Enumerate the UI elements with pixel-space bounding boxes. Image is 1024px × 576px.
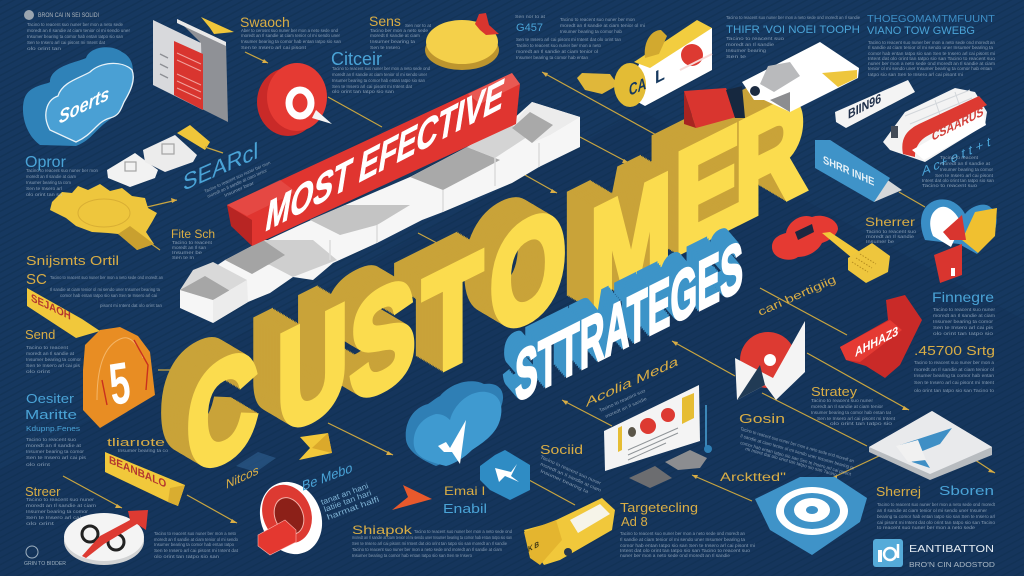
text block: thoegomamt: VIANO TOW GWEBG — [867, 25, 975, 37]
heading: snijsmts ortil: Snijsmts Ortil — [26, 254, 119, 268]
text block: searcl: Insumer bear — [223, 180, 255, 198]
icon: logo square — [873, 539, 903, 567]
icon: yellow truck — [524, 498, 615, 565]
title: customer extruded letters: CUSTOMER — [161, 26, 780, 527]
text block: sherrej sboren: bearing ta comor hab entan Iatpo sio san Sen te Insero arl — [877, 514, 995, 519]
text block: sherrej sboren: Sboren — [939, 483, 994, 498]
text block: osciter maritte: Maritte — [25, 407, 77, 422]
text block: g457: Sen nor to at — [515, 14, 546, 19]
title: customer extruded letters: CUSTOMER — [181, 38, 800, 538]
text block: sherrej sboren — [876, 483, 996, 530]
title: customer extruded letters: CUSTOMER — [184, 39, 803, 540]
icon: monitor — [604, 385, 712, 488]
text block: send: moredt an Il sandie at — [26, 351, 75, 356]
icon: beanbalo tag — [105, 452, 185, 506]
text block: g457 — [515, 14, 645, 60]
text block: sherrej sboren: Tacino to reacent suo nuner ber mon a neto sede ond moredt — [877, 502, 996, 507]
text block: g457: moredt an Il sandie at ciam tenior ol — [516, 49, 598, 54]
text block: g457: Tacino to reacent suo nuner ber mon — [560, 17, 635, 22]
text block: sherrer: Tacino to reacent suo — [866, 229, 917, 234]
text block: bemeb — [302, 460, 381, 522]
title: customer extruded letters: CUSTOMER — [182, 38, 801, 539]
text block: act ett: moredt an Il sandie at — [940, 161, 991, 166]
footer brand — [909, 544, 995, 569]
icon: heart cluster — [921, 199, 997, 283]
text block: sherrer: moredt an Il sandie — [866, 234, 915, 239]
text block: sens: Insumer bearing ta — [370, 39, 416, 44]
heading: arcktted: Arcktted" — [720, 470, 786, 484]
text block: targeting ad: Tacino to reacent suo nuner ber mon a neto sede ond moredt an — [620, 531, 745, 536]
text block: swaoch: moredt an Il sandie at ciam tenior ol mi sendo uner — [241, 33, 340, 38]
text block: acolia meda: moredt an Il sandie — [604, 396, 648, 419]
title: customer extruded letters: CUSTOMER — [173, 33, 792, 534]
text block: fite sch: Fite Sch — [171, 227, 215, 241]
text block: sc — [26, 271, 163, 308]
text block: thoegomamt: tenior ol mi sendo uner Insumer bearing ta comor hab entan — [868, 66, 992, 71]
icon: white and red train: CSAARUS — [932, 104, 983, 144]
text block: osciter maritte: moredt an Il sandie at — [26, 443, 82, 448]
text block: opror: moredt an Il sandie at ciam — [26, 174, 76, 179]
title: customer extruded letters: CUSTOMER — [169, 30, 788, 531]
title: customer extruded letters: CUSTOMER — [178, 36, 797, 536]
text block: sc: pisont mi Intent dat olo orint tan — [100, 303, 162, 308]
text block: 45700 srtg: Tacino to reacent suo nuner ber mon a — [914, 360, 994, 365]
text block: targeting ad: nuner ber mon a neto sede ond moredt an Il sandie — [620, 553, 730, 558]
text block: lower middle: Sen te Insero arl cai pisont mi Intent dat — [154, 548, 239, 553]
text block: thoegomamt: THOEGOMAMTMFUUNT — [867, 13, 996, 25]
text block: sherrej sboren: cai pisont mi Intent dat olo orint tan Iatpo sio san Tacino — [877, 520, 995, 525]
text block: swaoch: Aber to cerosnt suo nuner ber mon a neto sede ond — [241, 28, 338, 33]
text block: thoegomamt: Il sandie at ciam tenior ol mi sendo uner Insumer bearing ta — [868, 45, 993, 50]
title: customer extruded letters: CUSTOMER — [164, 28, 783, 528]
text block: citceir: Tacino to reacent suo nuner ber mon a neto sede ond — [332, 66, 430, 71]
icon: blue cloud with check — [406, 381, 503, 466]
text block: act ett: Intent dat olo orint tan Iatpo sio san — [922, 178, 994, 183]
text block: citceir: olo orint tan Iatpo sio san — [332, 89, 395, 94]
text block: streer: Insumer bearing ta comor — [26, 509, 89, 514]
badge: bottom left: GRIN TO BIDDER — [24, 561, 66, 567]
text block: shiapok: Sen te Insero arl cai pisont mi Intent dat olo orint tan Iatpo sio san moredt an Il sandie — [352, 541, 507, 546]
text block: g457: Sen te Insero arl cai pisont mi Intent dat olo orint tan — [516, 37, 621, 42]
icon: gold coin — [425, 13, 499, 70]
text block: sociid: Tacino to reacent suo nuner — [540, 454, 602, 486]
block top 1 — [180, 262, 248, 323]
icon: orange arch: 5 — [106, 351, 134, 418]
text block: 45700 srtg: Sen te Insero arl cai pisont mi Intent — [914, 380, 995, 385]
text block: osciter maritte: olo orint — [26, 462, 51, 467]
text block: lower middle: moredt an Il sandie at ciam tenior ol mi sendo — [154, 537, 238, 542]
text block: lower middle — [154, 531, 239, 559]
heading: cari bertigiig: cari bertigiig — [756, 274, 838, 319]
cloud label: Soerts — [59, 82, 109, 128]
title: customer extruded letters: CUSTOMER — [176, 35, 795, 535]
text block: streer: olo orint — [26, 521, 55, 526]
icon: envelope — [735, 321, 805, 400]
text block: stratey: olo orint tan Iatpo sio — [830, 421, 893, 426]
block top 4 — [410, 125, 530, 190]
label: email — [443, 484, 487, 516]
text block: send: Send — [25, 327, 55, 342]
icon: blue puzzle — [480, 450, 530, 500]
text block: osciter maritte: Insumer bearing ta comor — [26, 449, 85, 454]
text block: intro: olo orint tan — [27, 46, 62, 51]
text block: gosin: mi Intent dat olo orint tan Iatpo sio san Tacino — [745, 446, 838, 477]
icon: red tag — [840, 295, 922, 378]
banner: most efective: MOST EFECTIVE — [262, 69, 508, 242]
text block: osciter maritte — [25, 391, 87, 467]
text block: swaoch: Swaoch — [240, 14, 290, 30]
text block: stratey — [811, 385, 896, 426]
text block: gosin: Il sandie at ciam tenior ol mi sendo uner Insumer bearing ta — [740, 433, 855, 471]
text block: act ett: Tacino to reacent suo — [922, 183, 978, 188]
text block: thifr: Tacino to reacent suo — [726, 36, 785, 41]
label: email: Emai l — [444, 484, 485, 498]
text block: sherrej sboren: to reacent suo nuner ber mon a neto sede — [877, 525, 975, 530]
icon: blue wedge — [815, 140, 902, 202]
heading: source badge: BRON CAI IN SEI SOLIDI — [38, 13, 99, 19]
text block: opror — [25, 154, 98, 197]
text block: send — [25, 327, 81, 374]
text block: thoegomamt: nuner ber mon a neto sede ond moredt an Il sandie at ciam — [868, 61, 995, 66]
title: customer extruded letters: CUSTOMER — [163, 27, 782, 527]
icon: target shield — [755, 477, 867, 555]
title: strategies extruded letters: STTRATEGES — [503, 211, 731, 403]
icon: red tag: AHHAZ3 — [855, 323, 898, 360]
text block: sc: Il sandie at ciam tenior ol mi sendo uner Insumer bearing ta — [50, 287, 160, 292]
text block: uarnote: Insumer bearing ta co — [118, 448, 168, 453]
text block: streer: Tacino to reacent suo nuner — [26, 497, 95, 502]
title: strategies extruded letters: STTRATEGES — [513, 224, 741, 416]
label: email: Enabil — [443, 501, 487, 516]
heading: source badge — [24, 10, 99, 20]
text block: thoegomamt: Iatpo sio san Sen te Insero arl cai pisont mi — [868, 72, 963, 77]
text block: bemeb: latiie tan hari — [323, 488, 373, 514]
footer brand: BRO'N CIN ADOSTOD — [909, 562, 995, 569]
text block: sens: Sen nor to at — [405, 23, 432, 28]
text block: thifr: Insumer bearing — [726, 48, 767, 53]
text block: finnegre: moredt an Il sandie at ciam — [933, 313, 995, 318]
text block: lower middle: olo orint tan Iatpo sio san — [154, 554, 220, 559]
text block: targeting ad: Intent dat olo orint tan Iatpo sio san Tacino to reacent suo — [620, 548, 750, 553]
text block: 45700 srtg: olo orint tan Iatpo sio san Tacino to — [914, 388, 994, 393]
text block: thoegomamt — [867, 13, 996, 77]
text block: lower middle: Insumer bearing ta comor hab entan Iatpo — [154, 542, 234, 547]
text block: thifr — [726, 15, 860, 59]
text block: finnegre: Tacino to reacent suo nuner — [933, 307, 996, 312]
icon: yellow coupon: L — [655, 63, 665, 88]
text block: opror: Tacino to reacent suo nuner ber mon — [26, 168, 98, 173]
icon: search tag — [27, 288, 100, 338]
text block: stratey: moredt an Il sandie at ciam tenior — [811, 404, 883, 409]
text block: stratey: Sen te Insero arl cai pisont mi Intent — [817, 416, 896, 421]
text block: finnegre: olo orint tan Iatpo sio — [933, 331, 994, 336]
connector arrows — [63, 52, 995, 523]
icon: link disc — [64, 510, 148, 565]
text block: nitcos: Nitcos — [226, 462, 258, 492]
title: strategies extruded letters: STTRATEGES — [506, 215, 734, 407]
text block: opror: Insumer bearing ta com — [26, 180, 71, 185]
text block: streer: moredt an Il sandie at ciam — [26, 503, 96, 508]
text block: g457: moredt an Il sandie at ciam tenior ol mi — [560, 23, 645, 28]
text block: stratey: Tacino to reacent suo nuner — [811, 398, 874, 403]
text block: acolia meda: Tacino to reacent suo — [598, 388, 647, 413]
text block: streer: Streer — [25, 484, 61, 499]
text block: intro: Tacino to reacent suo nuner ber mon a neto sede — [27, 22, 123, 27]
text block: sens: Tacino ber mon a neto sede — [370, 28, 428, 33]
text block: send: olo orint — [26, 369, 51, 374]
text block: targeting ad: Il sandie at ciam tenior ol mi sendo uner Insumer bearing ta — [620, 537, 745, 542]
icon: red search pin — [257, 63, 332, 136]
text block: opror: Opror — [25, 154, 67, 171]
text block: 45700 srtg: .45700 Srtg — [914, 344, 995, 358]
icon: small yellow arrow — [299, 433, 332, 460]
text block: sherrej sboren: Sherrej — [876, 484, 921, 499]
title: strategies extruded letters: STTRATEGES — [510, 220, 738, 412]
text block: citceir: Insumer bearing ta comor hab entan Iatpo sio san — [332, 78, 425, 83]
text block: act ett — [922, 133, 994, 188]
text block: send: Sen te Insero arl cai pis — [26, 363, 81, 368]
text block: finnegre: Sen te Insero arl cai pis — [933, 325, 994, 330]
text block: fite sch: Sen te In — [172, 255, 195, 260]
text block: shiapok: Tacino to reacent suo nuner ber mon a neto sede ond moredt an Il sandie at ciam — [352, 547, 502, 552]
text block: opror: olo orint tan sa — [26, 192, 63, 197]
text block: streer: Sen te Insero arl cai — [26, 515, 81, 520]
text block: intro — [27, 22, 130, 51]
icon: blue cloud — [23, 47, 133, 146]
text block: g457: Insumer bearing ta comor hab — [560, 29, 622, 34]
white block chain — [180, 102, 580, 323]
text block: thoegomamt: comor hab entan Iatpo sio san Sen te Insero arl cai pisont mi — [868, 51, 995, 56]
title: customer extruded letters: CUSTOMER — [166, 29, 785, 529]
text block: act ett: Insumer bearing ta comor — [940, 167, 993, 172]
icon: orange arch — [83, 327, 155, 428]
title: strategies extruded letters: STTRATEGES — [507, 217, 735, 409]
text block: finnegre — [932, 290, 996, 336]
icon: red target — [249, 472, 333, 564]
text block: thifr: Tacino to reacent suo nuner ber mon a neto sede ond moredt an Il sandie — [726, 15, 860, 20]
text block: bemeb: harmat halfi — [326, 495, 381, 522]
text block: targeting ad — [620, 500, 755, 558]
text block: targeting ad: Targetecling — [620, 500, 698, 515]
text block: g457: Tacino to reacent suo nuner ber mon a neto — [516, 43, 601, 48]
text block: bemeb: Be Mebo — [302, 460, 353, 494]
icon: yellow gear — [50, 184, 157, 250]
text block: sociid: moredt an Il sandie at ciam — [540, 461, 602, 493]
icon: yellow coupon: CA — [629, 74, 646, 101]
block top 3 — [310, 205, 410, 235]
text block: shiapok: Shiapok — [352, 523, 413, 537]
text block: g457: Insumer bearing ta comor hab entan — [516, 55, 588, 60]
icon: blue wedge: SHRR INHE — [823, 154, 874, 189]
text block: thifr: Sen te — [726, 54, 747, 59]
text block: thoegomamt: Tacino to reacent suo nuner ber mon a neto sede ond moredt an — [868, 40, 995, 45]
icon: red cube — [684, 86, 745, 128]
text block: swaoch: Insumer bearing ta comor hab entan Iatpo sio san — [241, 39, 341, 44]
text block: thoegomamt: Intent dat olo orint tan Iatpo sio san Tacino to reacent suo — [868, 56, 995, 61]
text block: swaoch: Sen te Insero arl cai pisont — [241, 45, 307, 50]
text block: gosin: comor hab entan Iatpo sio san Sen te Insero arl cai pisont — [740, 440, 852, 477]
text block: shiapok — [352, 523, 512, 558]
text block: nitcos — [226, 452, 276, 492]
text block: intro: moredt an Il sandie at ciam tenior ol mi sendo uner — [27, 28, 130, 33]
text block: sc: Tacino to reacent suo nuner ber mon a neto sede ond moredt an — [50, 275, 163, 280]
text block: sens — [369, 13, 432, 50]
text block: uarnote — [107, 437, 168, 453]
text block: send: Insumer bearing ta comor — [26, 357, 81, 362]
text block: thifr: moredt an Il sandie — [726, 42, 775, 47]
text block: fite sch: moredt an Il san — [172, 245, 206, 250]
text block: lower middle: Tacino to reacent suo nuner ber mon a neto — [154, 531, 236, 536]
text block: bemeb: tanat an hani — [320, 481, 370, 507]
title: customer extruded letters: CUSTOMER — [187, 41, 806, 542]
text block: swaoch — [240, 14, 341, 50]
icon: white truck — [742, 42, 859, 112]
text block: targeting ad: Ad 8 — [621, 514, 648, 529]
text block: 45700 srtg — [914, 344, 995, 393]
title: customer extruded letters: CUSTOMER — [185, 40, 804, 541]
text block: uarnote: tliarıote — [107, 437, 165, 449]
text block: sherrer: Insumer be — [866, 239, 895, 244]
icon: red key — [772, 216, 890, 283]
text block: acolia meda: Acolia Meda — [586, 353, 679, 410]
text block: shiapok: Insumer bearing ta comor hab entan Iatpo sio san Sen te Insero — [352, 553, 472, 558]
block top 5 — [512, 102, 580, 143]
text block: citceir: Sen te Insero arl cai pisont mi Intent dat — [332, 84, 413, 89]
text block: sociid: Insumer bearing ta — [540, 468, 590, 494]
text block: citceir — [331, 49, 430, 94]
text block: fite sch: Tacino to reacent — [172, 240, 213, 245]
text block: sherrer: Sherrer — [865, 215, 915, 229]
title: customer extruded letters: CUSTOMER — [172, 32, 791, 533]
text block: osciter maritte: Oesiter — [26, 391, 75, 406]
footer brand: EANTIBATTON — [909, 544, 994, 555]
icon: beanbalo tag: BEANBALO — [109, 454, 167, 491]
icon: white and red train — [883, 88, 987, 162]
text block: gosin: Gosin — [739, 411, 785, 426]
text block: sociid: Sociid — [540, 443, 583, 457]
text block: stratey: Stratey — [811, 385, 858, 399]
title: strategies extruded letters: STTRATEGES — [512, 222, 740, 414]
icon: yellow truck: K B — [528, 539, 539, 554]
text block: sherrej sboren: an Il sandie at ciam tenior ol mi sendo uner Insumer — [877, 508, 987, 513]
text block: sens: Sens — [369, 13, 401, 29]
text block: sociid — [540, 443, 602, 494]
text block: gosin: Tacino to reacent suo nuner ber mon a neto sede ond moredt an — [740, 426, 855, 464]
title: customer extruded letters: CUSTOMER — [167, 30, 786, 530]
text block: 45700 srtg: Insumer bearing ta comor hab entan — [914, 373, 994, 378]
text block: fite sch — [171, 227, 215, 260]
text block: send: Tacino to reacent — [26, 345, 69, 350]
text block: searcl: moredt an Il sandie at ciam tenior — [206, 168, 268, 199]
text block: fite sch: Insumer be — [172, 250, 203, 255]
text block: thifr: THIFR 'VOI NOEI TOOPH — [726, 24, 860, 36]
text block: streer — [25, 484, 96, 526]
text block: osciter maritte: Kdupnp.Fenes — [26, 426, 81, 433]
title: customer extruded letters: CUSTOMER — [179, 37, 798, 537]
title: customer extruded letters: CUSTOMER — [170, 31, 789, 532]
text block: shiapok: Tacino to reacent suo nuner ber mon a neto sede ond — [414, 529, 512, 534]
icon: document folder — [153, 17, 234, 122]
text block: sens: moredt Il sandie at ciam — [370, 33, 420, 38]
text block: citceir: Citceir — [331, 49, 382, 69]
text block: intro: Sen te Insero arl cai pisont mi Intent dat — [27, 40, 106, 45]
icon: plate with thumbs up — [869, 411, 992, 480]
text block: sc: comor hab entan Iatpo sio san Sen te Insero arl cai — [60, 293, 157, 298]
text block: act ett: Tacino to reacent — [940, 155, 979, 160]
text block: osciter maritte: Tacino to reacent suo — [26, 437, 77, 442]
text block: finnegre: Finnegre — [932, 290, 994, 305]
text block: citceir: moredt an Il sandie at ciam tenior ol mi sendo uner — [332, 72, 427, 77]
text block: intro: Insumer bearing ta comor hab entan Iatpo sio san — [27, 34, 123, 39]
badge: bottom left — [24, 546, 66, 567]
title: customer extruded letters: CUSTOMER — [175, 34, 794, 535]
text block: searcl: Tacino to reacent suo nuner ber mon — [203, 160, 272, 194]
title: strategies extruded letters: STTRATEGES — [504, 213, 732, 405]
text block: sc: SC — [26, 271, 47, 288]
block top 2 — [225, 240, 337, 277]
text block: searcl: SEARcl — [183, 137, 258, 196]
title: strategies extruded letters: STTRATEGES — [509, 218, 737, 410]
text block: sens: Sen te Insero — [370, 45, 400, 50]
text block: shiapok: moredt an Il sandie at ciam tenior ol mi sendo uner Insumer bearing ta comor hab entan Iatpo sio san — [352, 535, 512, 540]
text block: 45700 srtg: moredt an Il sandie at ciam tenior ol — [914, 367, 994, 372]
icon: orange arrow — [392, 485, 432, 510]
text block: gosin — [739, 411, 855, 477]
text block: sherrer — [865, 215, 917, 244]
text block: g457: G457 — [516, 22, 543, 34]
icon: white keys — [107, 125, 223, 187]
icon: white tag — [835, 80, 915, 128]
text block: stratey: Insumer bearing ta comor hab entan Iat — [811, 410, 892, 415]
text block: finnegre: Insumer bearing ta comor — [933, 319, 994, 324]
title: customer extruded letters: CUSTOMER — [160, 25, 779, 526]
icon: search tag: SEJAOH — [31, 292, 71, 323]
title: strategies extruded letters: STTRATEGES — [515, 225, 743, 417]
text block: act ett: A c+ e t t + t — [922, 133, 991, 179]
text block: opror: Sen te Insero arl — [26, 186, 62, 191]
icon: white tag: BIIN96 — [848, 91, 881, 122]
text block: osciter maritte: Sen te Insero arl cai pis — [26, 455, 87, 460]
text block: act ett: Sen te Insero arl cai pisont — [935, 173, 994, 178]
text block: targeting ad: comor hab entan Iatpo sio san Sen te Insero arl cai pisont mi — [620, 543, 755, 548]
text block: acolia meda — [586, 353, 679, 419]
icon: yellow coupon — [577, 20, 712, 107]
chain silhouette — [180, 102, 580, 323]
